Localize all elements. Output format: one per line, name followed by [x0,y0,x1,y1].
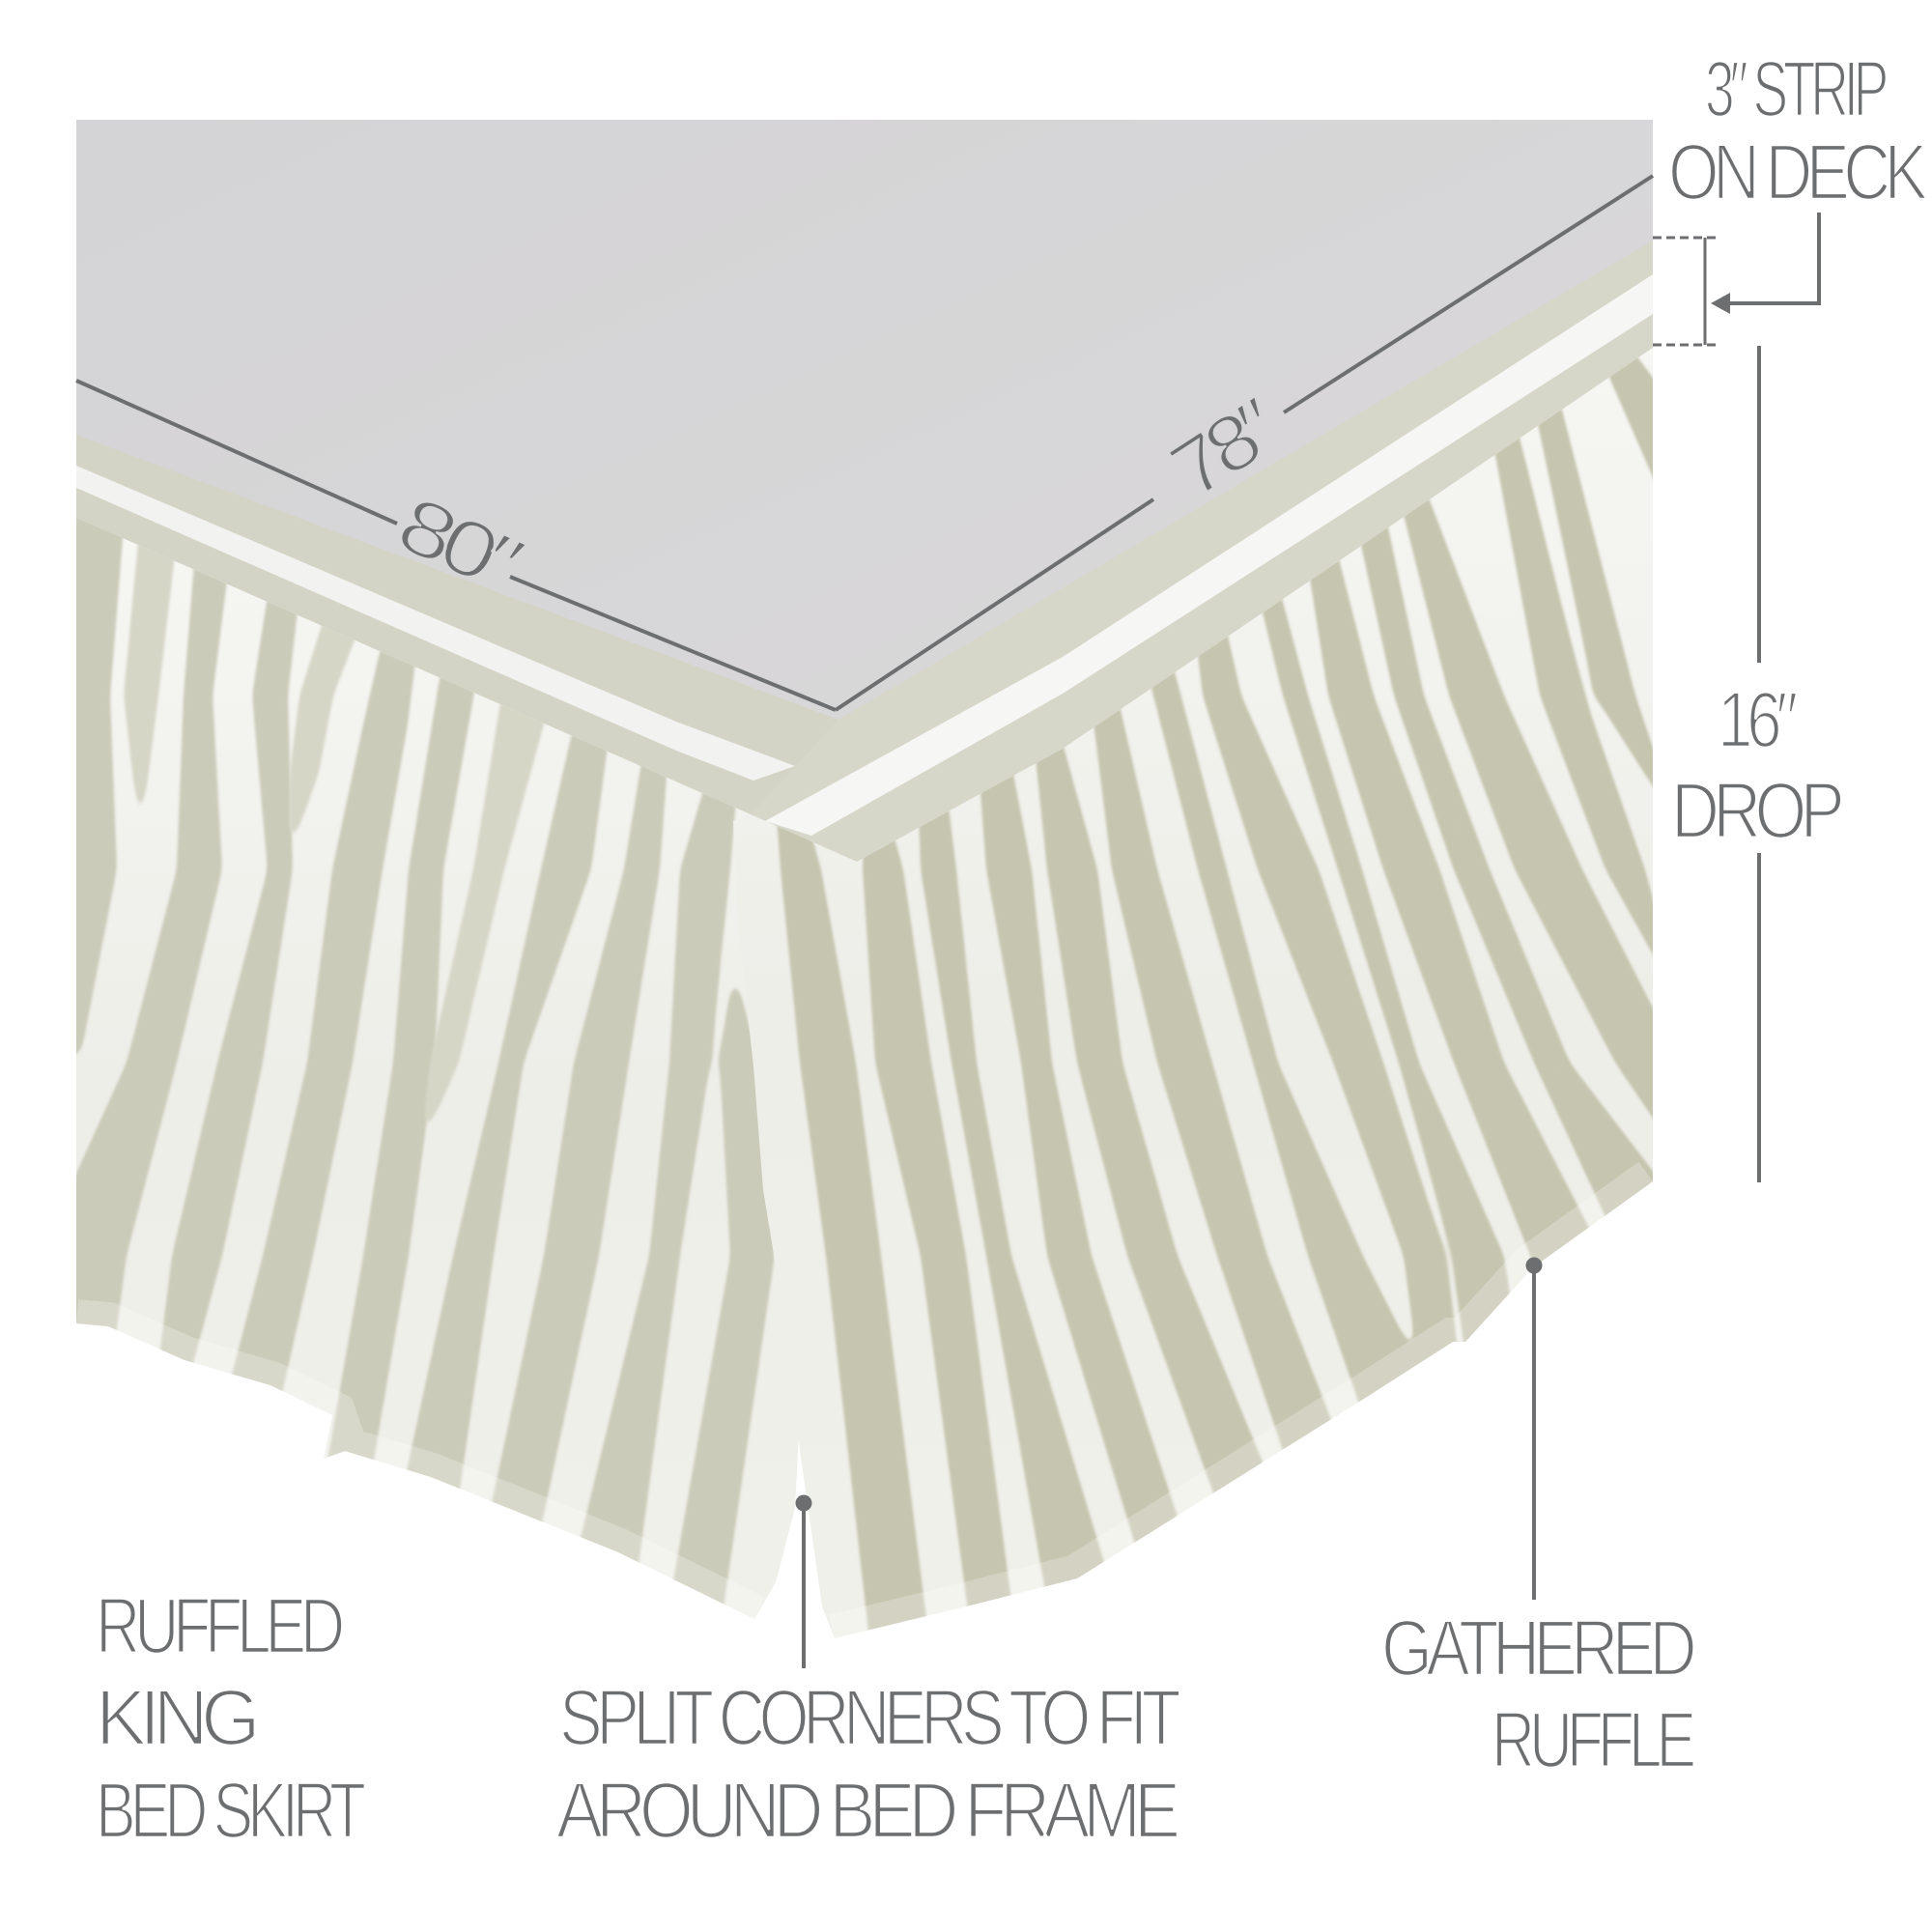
callout: split corners: AROUND BED FRAME [556,1767,1179,1855]
dimension: 16 inch drop: 16″ [1718,676,1798,764]
arrow: strip callout [1711,213,1819,314]
label: ruffled king bed skirt: KING [96,1674,255,1762]
dimension: 16 inch drop: DROP [1671,767,1842,855]
deck border band: left side [76,435,857,862]
panel: left skirt ruffle with stripes [76,518,798,1619]
bracket with dashed guides [1653,238,1718,345]
dimension: 16 inch drop [1671,346,1842,1182]
deck border band: right side [751,241,1653,862]
left hem [76,1323,754,1619]
callout: gathered ruffle: RUFFLE [1492,1696,1694,1784]
callout: split corners: SPLIT CORNERS TO FIT [559,1674,1180,1762]
white border strip: left side [76,466,795,781]
label: ruffled king bed skirt [96,1582,365,1855]
panel: right skirt ruffle with stripes [729,338,1681,1666]
dimension line: 80 inch: 80″ [384,479,534,611]
callout: gathered ruffle: GATHERED [1381,1605,1694,1692]
product photo: bed deck and skirt [39,120,1681,1666]
callout: split corners [556,1495,1180,1855]
dimension line: 80 inch [76,381,836,710]
right hem [835,1181,1653,1638]
dimension line: 78 inch [836,176,1653,710]
dimension line: 78 inch: 78″ [1155,383,1294,515]
label: 3 inch strip on deck [1668,45,1927,216]
white border strip: right side [765,274,1653,836]
callout: gathered ruffle [1381,1258,1694,1784]
label: ruffled king bed skirt: RUFFLED [96,1582,343,1670]
panel: grey mattress deck [76,120,1653,862]
label: ruffled king bed skirt: BED SKIRT [96,1767,365,1855]
